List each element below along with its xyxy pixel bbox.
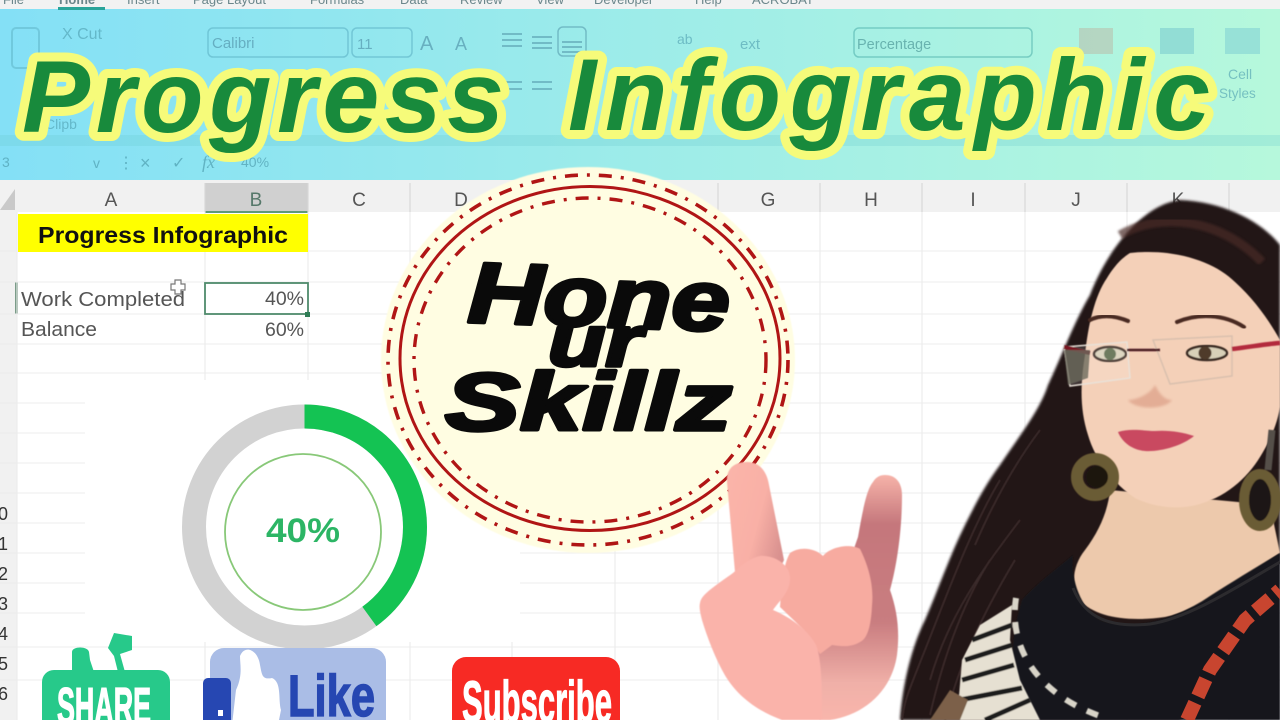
top banner: ext bbox=[740, 36, 761, 53]
channel badge: Hone ur Skillz: ur bbox=[548, 302, 647, 382]
thumb and palm bbox=[700, 556, 822, 720]
spreadsheet background: B bbox=[250, 190, 262, 211]
channel badge: Hone ur Skillz: Hone bbox=[466, 245, 732, 350]
data row: work completed: 40% bbox=[265, 288, 304, 310]
spreadsheet background: H bbox=[864, 190, 878, 211]
neck bbox=[1074, 490, 1280, 619]
black top bbox=[1010, 553, 1280, 720]
data row: work completed bbox=[21, 283, 310, 317]
title: Progress Infographic: Progress bbox=[22, 40, 504, 154]
heading cell: Progress Infographic bbox=[18, 214, 308, 252]
top banner: Cell bbox=[1228, 66, 1252, 82]
share button bbox=[42, 633, 170, 720]
icon: rock hand gesture bbox=[700, 462, 902, 720]
top banner: ab bbox=[677, 31, 693, 47]
data row: balance: 60% bbox=[265, 319, 304, 341]
donut 40 percent arc bbox=[194, 416, 415, 638]
eyebrows bbox=[1090, 316, 1244, 327]
data row: work completed: Work Completed bbox=[21, 289, 185, 311]
top banner bbox=[0, 0, 1280, 180]
top banner: Calibri bbox=[212, 35, 255, 52]
spreadsheet background: J bbox=[1071, 190, 1081, 211]
top banner: 40% bbox=[241, 154, 269, 170]
spreadsheet background: D bbox=[454, 190, 468, 211]
like button bbox=[203, 648, 386, 720]
top banner: Styles bbox=[1219, 86, 1256, 101]
top banner: 3 bbox=[2, 154, 10, 170]
channel badge: Hone ur Skillz bbox=[381, 167, 795, 553]
spreadsheet background: K bbox=[1172, 190, 1185, 211]
top banner: Clipb bbox=[45, 116, 77, 132]
top banner: ⋮ bbox=[118, 155, 134, 172]
top banner: v bbox=[93, 155, 100, 171]
pinky and back of hand bbox=[800, 475, 902, 720]
spreadsheet background: A bbox=[105, 190, 118, 211]
subscribe button bbox=[452, 657, 620, 720]
data row: balance: Balance bbox=[21, 319, 97, 341]
glasses bbox=[1064, 336, 1280, 386]
curled fingers bbox=[780, 546, 872, 654]
top banner: fx bbox=[202, 152, 215, 172]
lips bbox=[1118, 430, 1194, 451]
title: Progress Infographic bbox=[22, 38, 1210, 154]
top banner: Percentage bbox=[857, 37, 931, 53]
top banner: ✓ bbox=[172, 155, 185, 172]
spreadsheet background: C bbox=[352, 190, 366, 211]
loose hair strands bbox=[902, 430, 1040, 720]
spreadsheet cells bbox=[18, 214, 310, 341]
top banner: A bbox=[455, 34, 467, 54]
top banner: 11 bbox=[357, 36, 373, 53]
presenter portrait bbox=[900, 200, 1280, 720]
earrings bbox=[1077, 430, 1276, 526]
icon: cell cursor bbox=[171, 280, 185, 294]
top banner: A bbox=[420, 33, 434, 55]
title: Progress Infographic: Infographic bbox=[568, 38, 1210, 152]
heading cell: Progress Infographic: Progress Infographic bbox=[38, 222, 288, 248]
channel badge: Hone ur Skillz: Skillz bbox=[445, 357, 732, 448]
top banner: × bbox=[140, 153, 151, 173]
red stripe on top bbox=[1187, 590, 1280, 720]
spreadsheet background: I bbox=[970, 190, 976, 211]
neckline trim bbox=[1073, 562, 1280, 625]
hair bbox=[900, 200, 1280, 720]
spreadsheet background: G bbox=[761, 190, 775, 211]
eyes bbox=[1094, 346, 1227, 361]
progress donut chart bbox=[85, 380, 520, 642]
top banner: X Cut bbox=[62, 26, 103, 43]
patterned sleeve bbox=[930, 598, 1100, 720]
progress donut chart: 40% bbox=[266, 512, 340, 550]
index finger bbox=[727, 462, 784, 590]
face bbox=[1082, 252, 1280, 507]
data row: balance bbox=[21, 319, 304, 341]
